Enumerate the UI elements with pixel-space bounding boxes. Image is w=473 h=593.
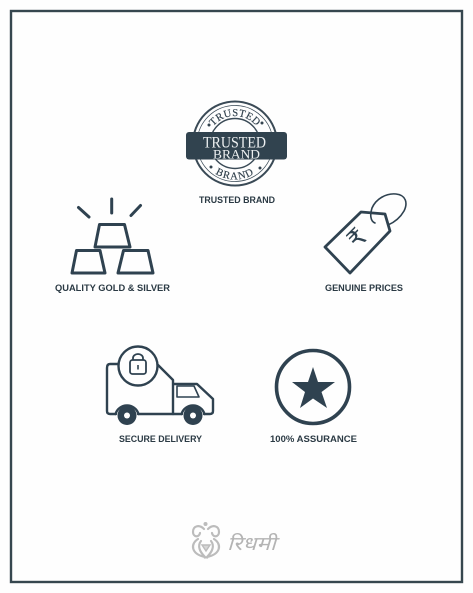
wheels bbox=[118, 406, 202, 425]
icon: price tag bbox=[325, 194, 406, 273]
label: 100% assurance: 100% ASSURANCE bbox=[270, 434, 357, 445]
badge: trusted brand: BRAND bbox=[215, 168, 252, 180]
label: secure delivery: SECURE DELIVERY bbox=[119, 434, 203, 445]
logo mark bbox=[193, 522, 219, 557]
badge: trusted brand: TRUSTED bbox=[203, 134, 266, 152]
logo wordmark: रिधमी bbox=[227, 532, 281, 555]
label: genuine prices: GENUINE PRICES bbox=[325, 283, 403, 294]
badge: trusted brand bbox=[186, 100, 287, 186]
icon: gold bars bbox=[72, 199, 153, 273]
icon: star in circle bbox=[276, 350, 350, 424]
label: trusted brand: TRUSTED BRAND bbox=[199, 195, 275, 206]
logo bbox=[193, 522, 281, 557]
badge: trusted brand: BRAND bbox=[213, 148, 260, 162]
icon: delivery truck with lock bbox=[107, 346, 213, 425]
banner bbox=[186, 132, 287, 160]
rupee sign: ₹ bbox=[341, 222, 373, 254]
badge: trusted brand: TRUSTED bbox=[208, 109, 260, 126]
label: quality gold and silver: QUALITY GOLD & SILVER bbox=[55, 283, 170, 294]
lock badge bbox=[118, 346, 158, 386]
